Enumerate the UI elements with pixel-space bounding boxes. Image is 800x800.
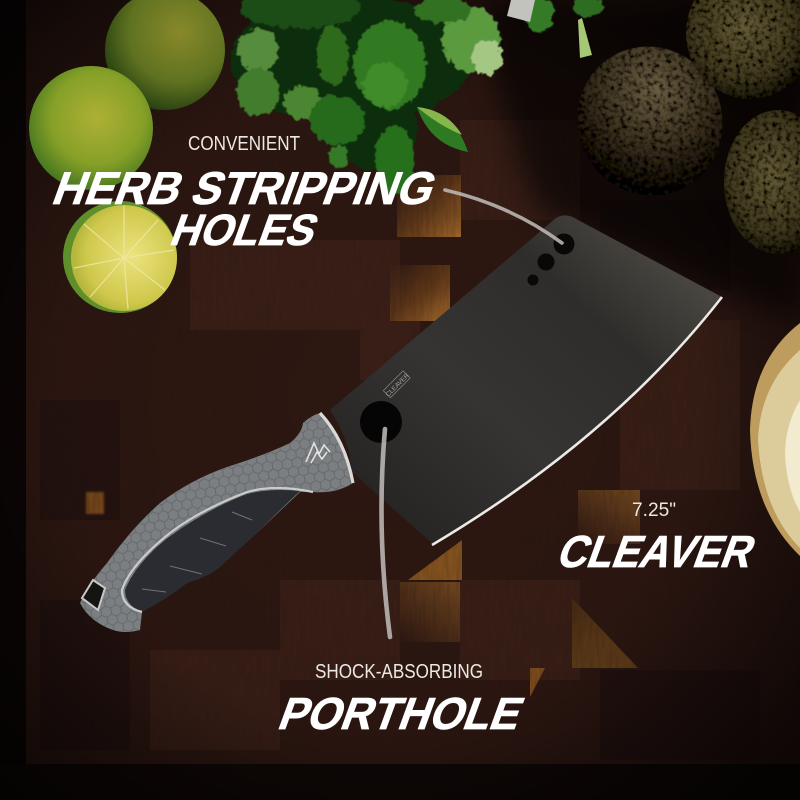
blade hole medium bbox=[538, 254, 554, 270]
food: cut lime half bbox=[63, 201, 177, 313]
cleaver knife bbox=[80, 215, 722, 632]
food: top lime bbox=[105, 0, 225, 110]
bright wood triangle: small bbox=[530, 668, 545, 697]
white ridge bbox=[122, 488, 313, 612]
food: cilantro stem bbox=[578, 18, 592, 58]
black rubber grip bbox=[125, 490, 300, 612]
food: cilantro leaves bbox=[230, 0, 603, 195]
food: large avocado bbox=[553, 23, 747, 219]
bright wood block: middle bbox=[390, 265, 450, 321]
bright wood block: lower centre bbox=[400, 582, 460, 642]
label: 7.25 inch: 7.25" bbox=[632, 500, 676, 521]
blade stamp: CLEAVER bbox=[385, 372, 411, 398]
bright wood block: right bbox=[578, 490, 640, 544]
blade bbox=[330, 215, 722, 545]
handle logo bbox=[306, 443, 330, 463]
blade hole small bbox=[528, 274, 538, 286]
lanyard hole bbox=[82, 580, 105, 610]
label: convenient: CONVENIENT bbox=[188, 133, 300, 155]
bright wood block: upper bbox=[397, 175, 461, 237]
callout line: porthole bbox=[381, 429, 390, 637]
heading: cleaver: CLEAVER bbox=[551, 526, 763, 577]
bright wood block: small left bbox=[86, 492, 104, 514]
white bolster stripe bbox=[320, 413, 353, 483]
label: shock-absorbing: SHOCK-ABSORBING bbox=[315, 661, 483, 683]
heading: holes: HOLES bbox=[164, 205, 325, 255]
heading: porthole: PORTHOLE bbox=[272, 688, 531, 739]
bright wood triangle: lower right bbox=[572, 598, 638, 668]
food: white tag bbox=[507, 0, 535, 22]
grip highlights bbox=[142, 512, 252, 592]
porthole bbox=[360, 401, 402, 443]
blade hole large bbox=[554, 234, 574, 254]
food: right avocado bbox=[724, 110, 800, 254]
hexagon texture bbox=[80, 413, 353, 632]
handle bbox=[80, 413, 353, 632]
heading: herb stripping: HERB STRIPPING bbox=[46, 163, 444, 215]
grey handle body bbox=[80, 413, 353, 632]
food: tortillas bbox=[750, 323, 800, 556]
bright wood block: below blade bbox=[408, 540, 462, 580]
food: top right avocado bbox=[686, 0, 800, 99]
food: whole lime bbox=[29, 66, 153, 190]
food: bright cilantro leaf bbox=[417, 107, 468, 152]
callout line: herb stripping holes bbox=[445, 190, 562, 243]
